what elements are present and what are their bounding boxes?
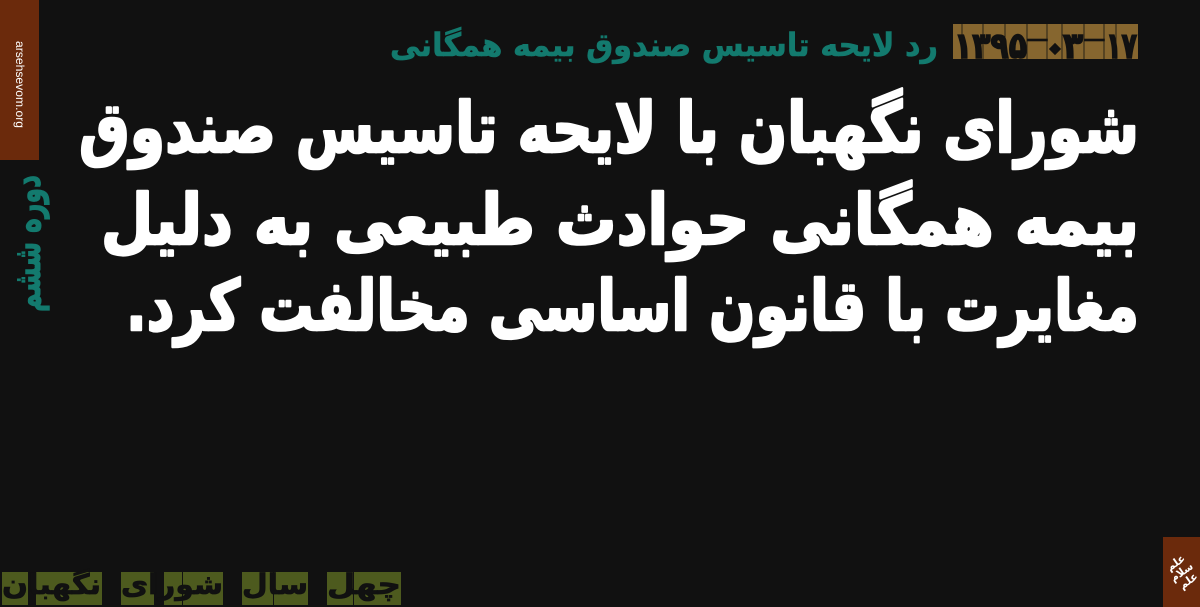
vertical label: session: دوره ششم bbox=[5, 175, 50, 312]
series title badge: شورای bbox=[121, 568, 223, 601]
panel: website tab: arsehsevom.org bbox=[13, 41, 27, 128]
panel: website tab bbox=[0, 0, 39, 160]
subtitle: رد لایحه تاسیس صندوق بیمه همگانی bbox=[390, 26, 938, 64]
series title badge: نگهبان bbox=[2, 568, 101, 601]
series title badge: سال bbox=[242, 568, 308, 601]
series title badge bbox=[2, 568, 401, 605]
date badge bbox=[953, 24, 1138, 67]
logo tab bbox=[1161, 537, 1200, 607]
logo tab: سلام bbox=[1168, 560, 1196, 585]
date badge: ۱۳۹۵ bbox=[954, 26, 1027, 67]
series title badge: چهل bbox=[327, 568, 401, 601]
date badge: ۱۷ bbox=[1106, 26, 1137, 67]
main headline bbox=[79, 87, 1139, 347]
date badge: ۳ bbox=[1063, 26, 1083, 67]
logo tab: علم bbox=[1164, 552, 1188, 574]
